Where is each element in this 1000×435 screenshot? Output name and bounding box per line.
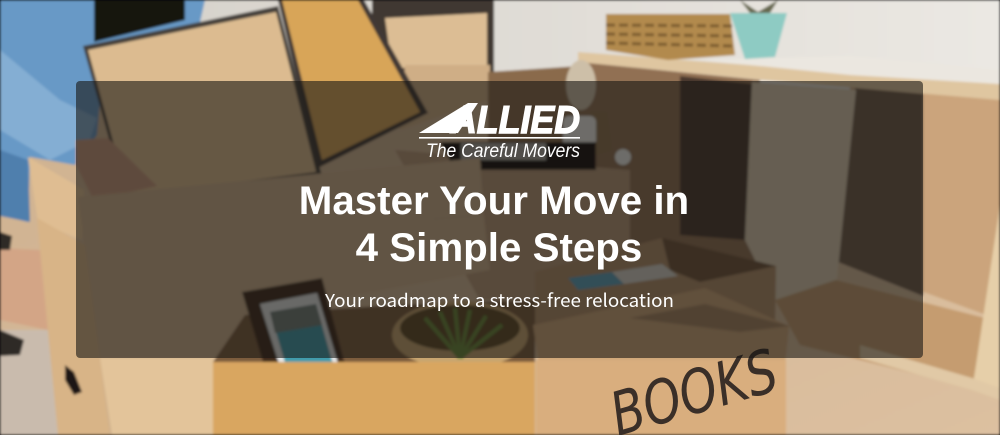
title: 4 Simple Steps	[356, 225, 642, 270]
papers on shelf	[700, 56, 1000, 84]
shelf interior left	[580, 62, 760, 300]
big box side	[37, 218, 112, 435]
small box contents	[568, 272, 624, 290]
subtitle: Your roadmap to a stress-free relocation	[324, 287, 674, 313]
shelf interior right back	[850, 85, 1000, 320]
shelf right upright	[973, 205, 1000, 392]
big box hand hole	[65, 365, 82, 395]
big box top flap	[78, 158, 484, 246]
box behind on floor	[395, 150, 630, 300]
title: Master Your Move in	[299, 178, 689, 223]
photo mat	[260, 293, 340, 370]
label behind logo	[461, 143, 546, 160]
photo scene	[270, 304, 333, 366]
plant pot	[392, 301, 528, 369]
teal pot	[730, 13, 787, 59]
dark shoe	[0, 330, 24, 356]
big box front	[85, 215, 490, 435]
white vase	[563, 116, 596, 172]
books box front	[536, 360, 786, 435]
shelf divider panel	[745, 82, 856, 300]
shelf floor	[775, 280, 985, 388]
lower rear box	[400, 65, 490, 130]
frame two	[278, 0, 428, 168]
framed photo	[242, 278, 347, 372]
dark rear furniture	[372, 0, 494, 72]
open box back wall	[213, 300, 535, 362]
plant leaves	[425, 308, 502, 358]
round object	[615, 149, 631, 165]
title	[299, 178, 689, 270]
shelf bottom edge	[860, 345, 1000, 400]
shelf top board	[578, 52, 1000, 100]
twine	[590, 112, 612, 155]
Allied logo: ALLIED	[450, 99, 580, 142]
open box front	[213, 362, 535, 435]
lamp bulb	[566, 60, 596, 110]
dark gap behind logo	[440, 142, 596, 170]
rear middle box	[488, 66, 580, 160]
leg	[0, 248, 48, 330]
small box back	[535, 238, 776, 340]
frame one	[83, 6, 322, 196]
Allied logo	[419, 99, 580, 162]
big box side flap	[28, 157, 84, 240]
rear box	[385, 13, 487, 68]
wall	[200, 0, 1000, 100]
dark top under shirt	[94, 0, 185, 42]
hand	[76, 138, 157, 197]
pot plant	[740, 0, 778, 13]
books box tape	[630, 304, 790, 332]
dark translucent overlay panel	[76, 81, 923, 358]
Allied logo: The Careful Movers	[426, 141, 580, 162]
denim shirt	[0, 0, 205, 222]
left floor	[0, 330, 70, 435]
wicker basket	[606, 14, 735, 60]
lower box front area	[100, 358, 215, 435]
books box top	[533, 288, 789, 372]
